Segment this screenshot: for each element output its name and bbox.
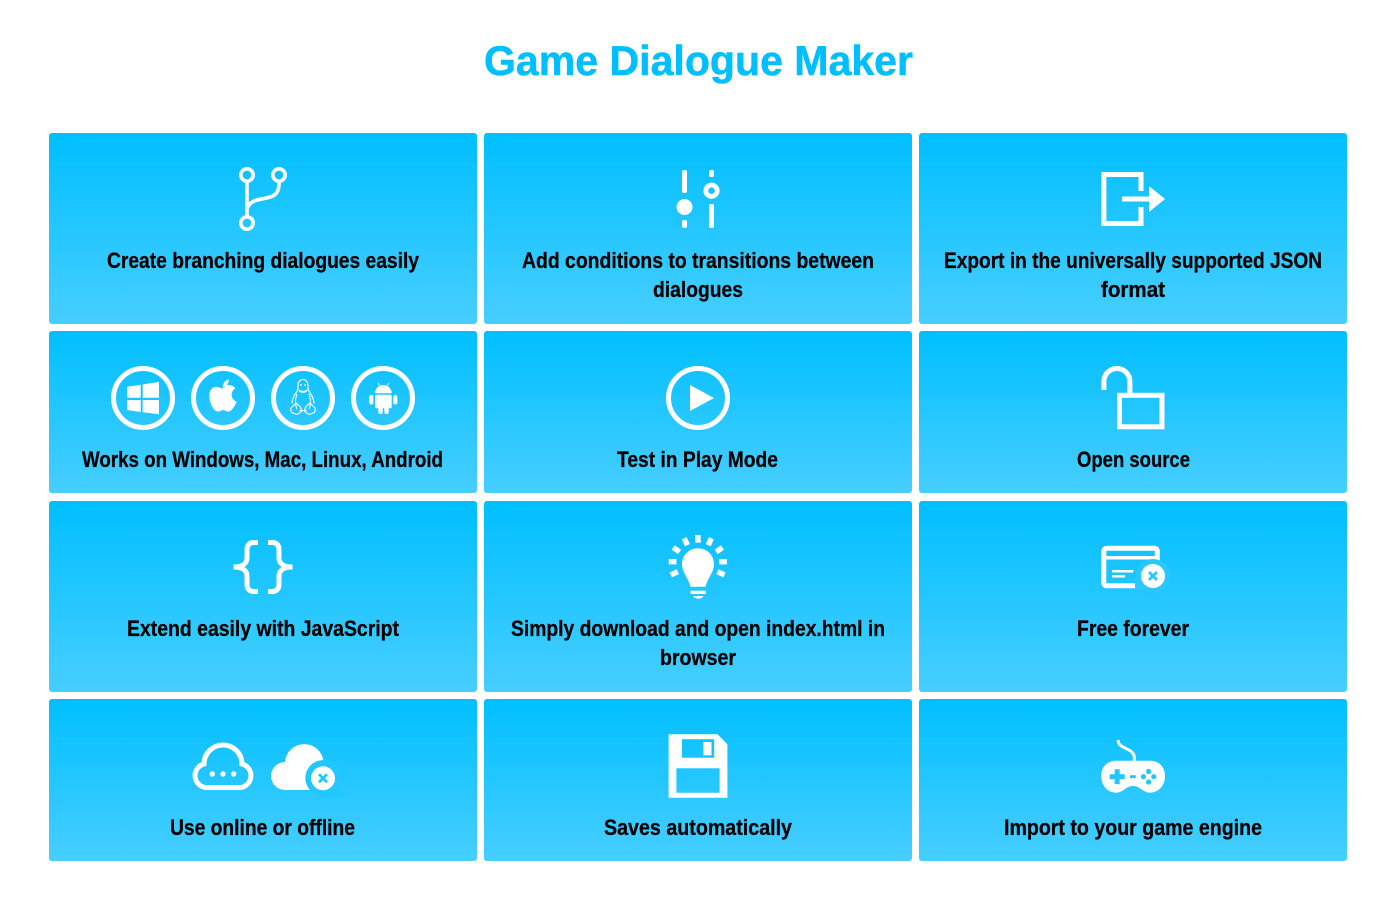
label: conditions: Add conditions to transitions between: [522, 248, 874, 273]
label: play mode: Test in Play Mode: [617, 447, 778, 472]
icon: sliders: [676, 170, 717, 228]
label: export: format: [1101, 277, 1166, 302]
icon: braces: [234, 542, 292, 592]
icon: floppy disk: [669, 734, 727, 798]
icon: windows: [114, 368, 172, 428]
icon: play: [668, 368, 728, 428]
label: free: Free forever: [1077, 616, 1189, 641]
label: javascript: Extend easily with JavaScript: [127, 616, 400, 641]
panel: branching dialogues: [49, 133, 477, 324]
icon: online cloud: [195, 745, 251, 788]
panel: play mode: [484, 331, 912, 493]
panel: game engine: [919, 699, 1347, 861]
label: saves: Saves automatically: [604, 815, 793, 840]
icon: gamepad: [1101, 740, 1165, 793]
icon: open lock: [1104, 369, 1162, 427]
label: export: [944, 248, 1322, 302]
panel: javascript: [49, 501, 477, 692]
icon: apple: [194, 368, 252, 428]
label: platforms: Works on Windows, Mac, Linux, Android: [82, 447, 443, 472]
label: conditions: dialogues: [653, 277, 743, 302]
title: Game Dialogue Maker: [484, 37, 913, 84]
label: export: Export in the universally supported JSON: [944, 248, 1322, 273]
icon: credit card with cross: [1103, 548, 1170, 593]
panel: open source: [919, 331, 1347, 493]
label: download: Simply download and open index.html in: [511, 616, 885, 641]
label: game engine: Import to your game engine: [1004, 815, 1262, 840]
panel: conditions: [484, 133, 912, 324]
icon: linux: [274, 368, 332, 428]
icon: light bulb: [669, 535, 727, 599]
icon: export: [1104, 174, 1165, 224]
label: conditions: [522, 248, 874, 302]
panel: online or offline: [49, 699, 477, 861]
panel: saves: [484, 699, 912, 861]
label: branching: Create branching dialogues easily: [107, 248, 420, 273]
icon: offline cloud: [271, 744, 344, 798]
label: online: Use online or offline: [170, 815, 355, 840]
panel: download: [484, 501, 912, 692]
label: download: [511, 616, 885, 670]
panel: free: [919, 501, 1347, 692]
label: download: browser: [660, 645, 736, 670]
label: open source: Open source: [1077, 447, 1190, 472]
icon: android: [354, 368, 412, 428]
panel: export JSON: [919, 133, 1347, 324]
panel: platforms: [49, 331, 477, 493]
icon: branch: [241, 169, 285, 229]
